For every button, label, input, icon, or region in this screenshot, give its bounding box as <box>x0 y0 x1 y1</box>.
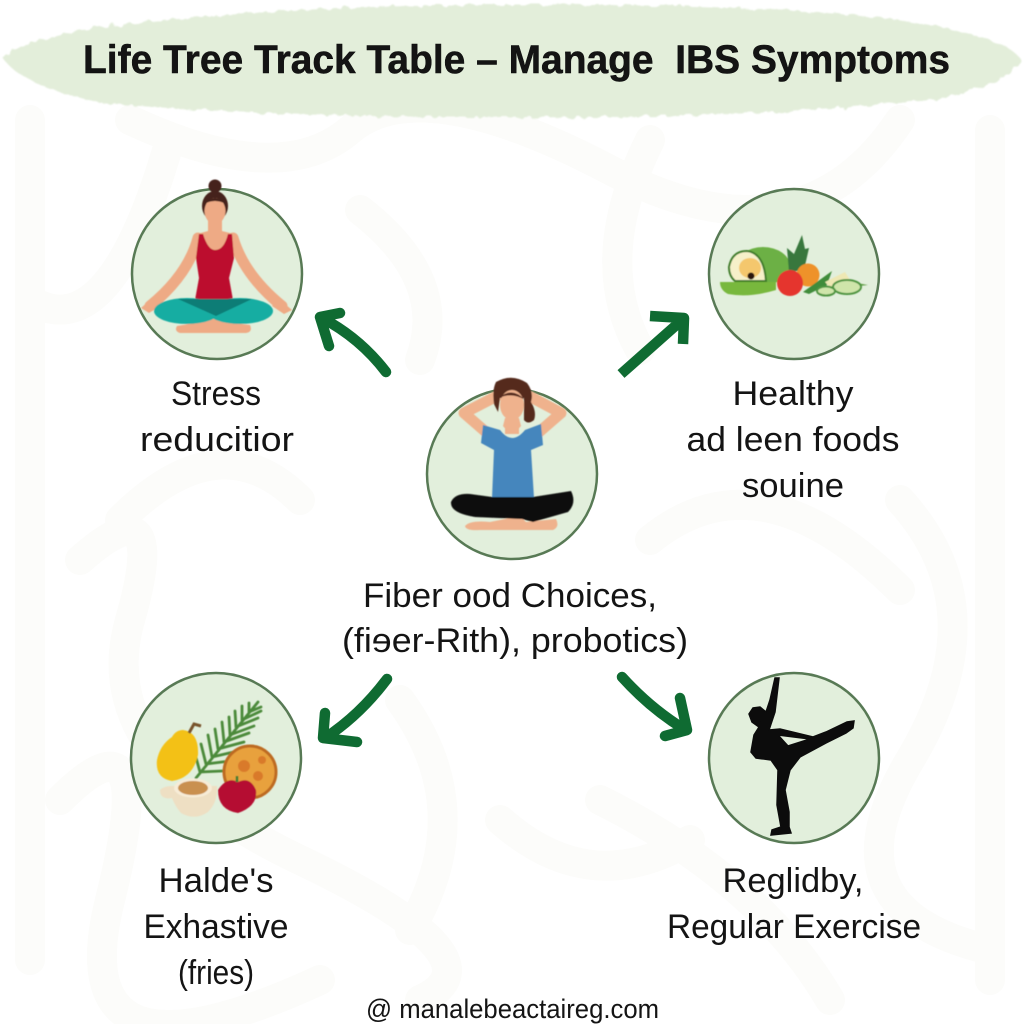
label: reduction: reducitior <box>140 421 294 459</box>
label: source: souine <box>742 467 844 505</box>
label: fries: (fries) <box>178 954 254 992</box>
icon: fruit and vegetables <box>720 235 868 296</box>
label: regular exercise: Regular Exercise <box>667 908 921 946</box>
label: fiber food choices: Fiber ood Choices, <box>363 577 657 615</box>
panel: foods to avoid <box>131 673 301 992</box>
arrow: to regular exercise <box>622 677 687 736</box>
arrow: to foods to avoid <box>323 679 387 742</box>
label: lean foods: ad leen foods <box>686 421 900 459</box>
title: Life Tree Track Table – Manage IBS Symptoms <box>83 38 950 82</box>
arrow: to stress reduction <box>320 313 386 372</box>
arrow: to healthy foods <box>621 316 684 374</box>
label: exhaustive: Exhastive <box>144 908 288 946</box>
icon: dancer silhouette <box>749 678 854 835</box>
label: healthy: Healthy <box>732 375 854 413</box>
footer website: @ manalebeactaireg.com <box>366 994 659 1024</box>
panel: healthy foods <box>686 189 900 505</box>
label: regularly: Reglidby, <box>722 862 864 900</box>
panel: stress reduction <box>132 180 302 459</box>
panel: fiber food choices <box>342 378 688 660</box>
icon: mixed food group <box>157 702 276 817</box>
icon: seated woman in blue top <box>451 378 573 530</box>
panel: regular exercise <box>667 673 921 946</box>
label: foods name: Halde's <box>158 862 274 900</box>
label: fiber-rich, probiotics: (fiɘer-Rith), probotics) <box>342 622 688 660</box>
label: stress: Stress <box>171 375 261 413</box>
icon: meditating woman in red top <box>141 180 292 333</box>
title banner <box>3 5 1021 117</box>
